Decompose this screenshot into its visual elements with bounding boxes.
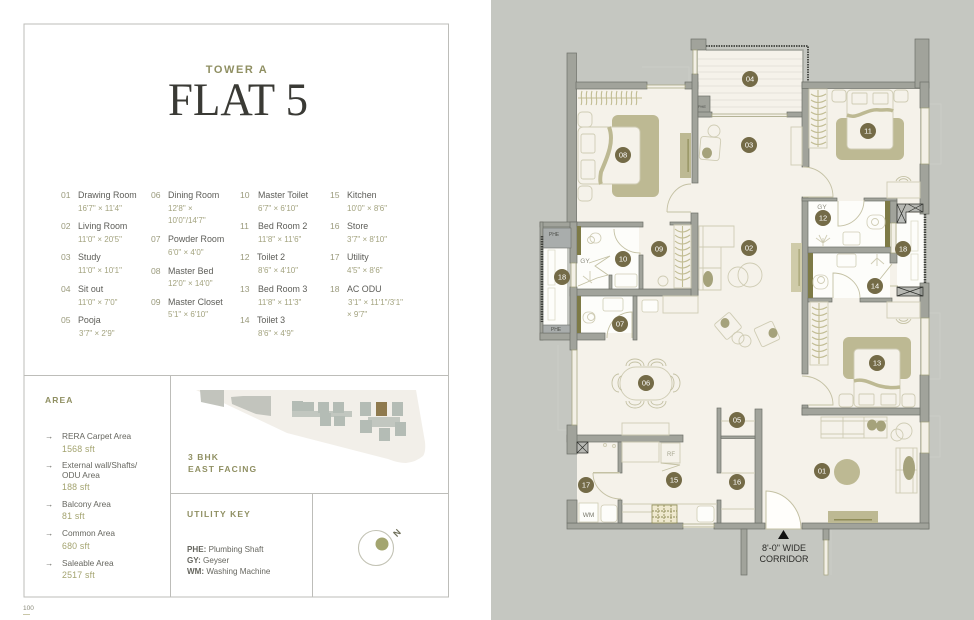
room schedule table: 11'0" × 20'5"	[78, 235, 122, 244]
walls: PHE	[549, 232, 560, 238]
crossed shaft boxes	[577, 204, 923, 453]
room schedule table: 10'0" × 8'6"	[347, 204, 387, 213]
room schedule table: 4'5" × 8'6"	[347, 266, 383, 275]
panel: area statement: Balcony Area	[62, 499, 111, 509]
room schedule table: 6'0" × 4'0"	[168, 248, 204, 257]
room schedule table: Bed Room 3	[258, 284, 307, 294]
room number markers: 16	[733, 478, 741, 487]
panel: utility key: UTILITY KEY	[187, 509, 251, 519]
furniture: dining table and chairs	[612, 359, 680, 435]
room schedule table: 11	[240, 221, 249, 231]
room number markers: 07	[616, 320, 624, 329]
furniture: kitchen, utility and store: RF	[667, 452, 675, 458]
room schedule table: 8'6" × 4'10"	[258, 266, 298, 275]
room number markers: 12	[819, 214, 827, 223]
room number markers: 08	[619, 151, 627, 160]
room schedule table: 11'8" × 11'3"	[258, 298, 302, 307]
room schedule table: 16'7" × 11'4"	[78, 204, 122, 213]
room schedule table: Drawing Room	[78, 190, 137, 200]
room schedule table: Master Toilet	[258, 190, 309, 200]
page number	[23, 605, 34, 615]
room schedule table: 01	[61, 190, 71, 200]
panel: area statement: →	[45, 499, 53, 509]
room schedule table: Toilet 3	[257, 315, 285, 325]
room schedule table: 13	[240, 284, 250, 294]
room schedule table: Sit out	[78, 284, 104, 294]
room schedule table: 08	[151, 266, 161, 276]
room schedule table: Study	[78, 252, 101, 262]
floor plan	[540, 39, 941, 575]
label: corridor width: 8'-0" WIDE	[762, 543, 806, 553]
panel: left information sheet	[0, 0, 491, 620]
room schedule table: 3'1" × 11'1"/3'1"	[348, 298, 403, 307]
floor area	[577, 88, 920, 529]
arrow: corridor entry	[778, 530, 789, 539]
furniture: bedroom 2	[809, 89, 920, 198]
shafts	[543, 228, 571, 248]
panel: area statement: Saleable Area	[62, 558, 114, 568]
room schedule table: 12'0" × 14'0"	[168, 279, 213, 288]
room schedule table: 16	[330, 221, 340, 231]
room schedule table: 6'7" × 6'10"	[258, 204, 298, 213]
furniture: toilets 2 and 3: GY	[817, 204, 827, 211]
furniture: toilets 2 and 3	[813, 204, 898, 289]
room schedule table: 3'7" × 2'9"	[79, 329, 115, 338]
panel: area statement: 2517 sft	[62, 570, 95, 580]
room schedule table: 11'0" × 7'0"	[78, 298, 118, 307]
panel: area statement: ODU Area	[62, 470, 100, 480]
room schedule table: 10'0"/14'7"	[168, 216, 206, 225]
panel: area statement	[45, 395, 138, 580]
room schedule table: Pooja	[78, 315, 101, 325]
panel: area statement: →	[45, 528, 53, 538]
furniture: master toilet and powder room: GY	[580, 258, 590, 265]
dark stone ledges	[577, 201, 890, 333]
label: 3 BHK East Facing: 3 BHK	[188, 452, 219, 462]
icon: north compass	[358, 527, 403, 566]
site key plan	[196, 390, 425, 463]
title: Flat 5: FLAT 5	[168, 74, 308, 126]
room schedule table: 11'0" × 10'1"	[78, 266, 122, 275]
room schedule table: 05	[61, 315, 71, 325]
room schedule table: Store	[347, 221, 368, 231]
room number markers: 04	[746, 75, 754, 84]
room schedule table: 03	[61, 252, 71, 262]
faint outlines outside the walls	[558, 67, 941, 575]
room schedule table: × 9'7"	[347, 310, 367, 319]
panel: area statement: 680 sft	[62, 541, 90, 551]
room number markers: 18	[899, 245, 907, 254]
room schedule table: 8'6" × 4'9"	[258, 329, 294, 338]
room schedule table: 15	[330, 190, 340, 200]
room schedule table: 02	[61, 221, 71, 231]
panel: area statement: External wall/Shafts/	[62, 460, 138, 470]
furniture: kitchen, utility and store	[579, 421, 755, 523]
room schedule table: 3'7" × 8'10"	[347, 235, 387, 244]
room schedule table: 11'8" × 11'6"	[258, 235, 302, 244]
room number markers: 10	[619, 255, 627, 264]
room schedule table: Master Closet	[168, 297, 223, 307]
room 04: sit out deck	[698, 46, 808, 115]
room number markers: 15	[670, 476, 678, 485]
panel: floor plan background	[491, 0, 974, 620]
panel: utility key: WM: Washing Machine	[187, 567, 271, 576]
doors	[593, 167, 864, 529]
walls: PHE	[551, 327, 562, 333]
room schedule table: AC ODU	[347, 284, 382, 294]
furniture: master bedroom	[578, 91, 691, 201]
room schedule table: 06	[151, 190, 161, 200]
room number markers: 11	[864, 127, 872, 136]
room number markers: 09	[655, 245, 663, 254]
furniture: bedroom 3	[810, 302, 920, 407]
panel: utility key	[187, 509, 271, 576]
label: 3 BHK East Facing: EAST FACING	[188, 464, 257, 474]
room number markers: 17	[582, 481, 590, 490]
room schedule table: Living Room	[78, 221, 127, 231]
room schedule table: Dining Room	[168, 190, 219, 200]
panel: area statement: →	[45, 431, 53, 441]
label: 3 BHK East Facing	[188, 452, 257, 474]
panel: area statement: RERA Carpet Area	[62, 431, 132, 441]
title: Tower A: TOWER A	[206, 64, 268, 76]
room number markers: 18	[558, 273, 566, 282]
AC ODU rails	[542, 214, 925, 322]
room schedule table: 14	[240, 315, 250, 325]
room number markers: 01	[818, 467, 826, 476]
walls: PHE	[698, 104, 706, 109]
label: corridor width	[760, 543, 809, 564]
furniture: master toilet and powder room	[578, 233, 698, 323]
page number: 100	[23, 605, 34, 612]
room number markers	[554, 71, 911, 493]
room schedule table: 18	[330, 284, 340, 294]
furniture: living room chairs	[714, 312, 780, 347]
furniture: kitchen, utility and store: WM	[583, 512, 594, 519]
room schedule table: Powder Room	[168, 234, 224, 244]
walls	[540, 39, 929, 575]
panel: area statement: AREA	[45, 395, 74, 405]
panel: area statement: Common Area	[62, 528, 115, 538]
room schedule table: 17	[330, 252, 340, 262]
panel: area statement: 1568 sft	[62, 444, 95, 454]
room schedule table: Master Bed	[168, 266, 213, 276]
room schedule table: Bed Room 2	[258, 221, 307, 231]
room schedule table: 10	[240, 190, 250, 200]
furniture: study chair	[699, 125, 721, 161]
room schedule table: 5'1" × 6'10"	[168, 310, 208, 319]
room schedule table	[61, 190, 403, 338]
windows	[571, 50, 929, 575]
room number markers: 06	[642, 379, 650, 388]
room schedule table: 04	[61, 284, 71, 294]
icon: north compass: N	[391, 527, 403, 539]
panel: utility key: GY: Geyser	[187, 556, 229, 565]
room number markers: 02	[745, 244, 753, 253]
panel: area statement: 188 sft	[62, 482, 90, 492]
room schedule table: Toilet 2	[257, 252, 285, 262]
furniture: drawing room	[821, 417, 917, 523]
room schedule table: Utility	[347, 252, 369, 262]
room number markers: 05	[733, 416, 741, 425]
room schedule table: 12'8" ×	[168, 204, 193, 213]
room number markers: 13	[873, 359, 881, 368]
label: corridor width: CORRIDOR	[760, 554, 809, 564]
room schedule table: 07	[151, 234, 161, 244]
room number markers: 14	[871, 282, 879, 291]
panel: utility key: PHE: Plumbing Shaft	[187, 545, 264, 554]
panel: area statement: 81 sft	[62, 511, 85, 521]
room schedule table: 09	[151, 297, 161, 307]
room number markers: 03	[745, 141, 753, 150]
panel: area statement: →	[45, 460, 53, 470]
furniture: living room sofa	[699, 127, 802, 292]
furniture: master closet	[658, 225, 691, 288]
room schedule table: 12	[240, 252, 250, 262]
panel: area statement: →	[45, 558, 53, 568]
room schedule table: Kitchen	[347, 190, 377, 200]
